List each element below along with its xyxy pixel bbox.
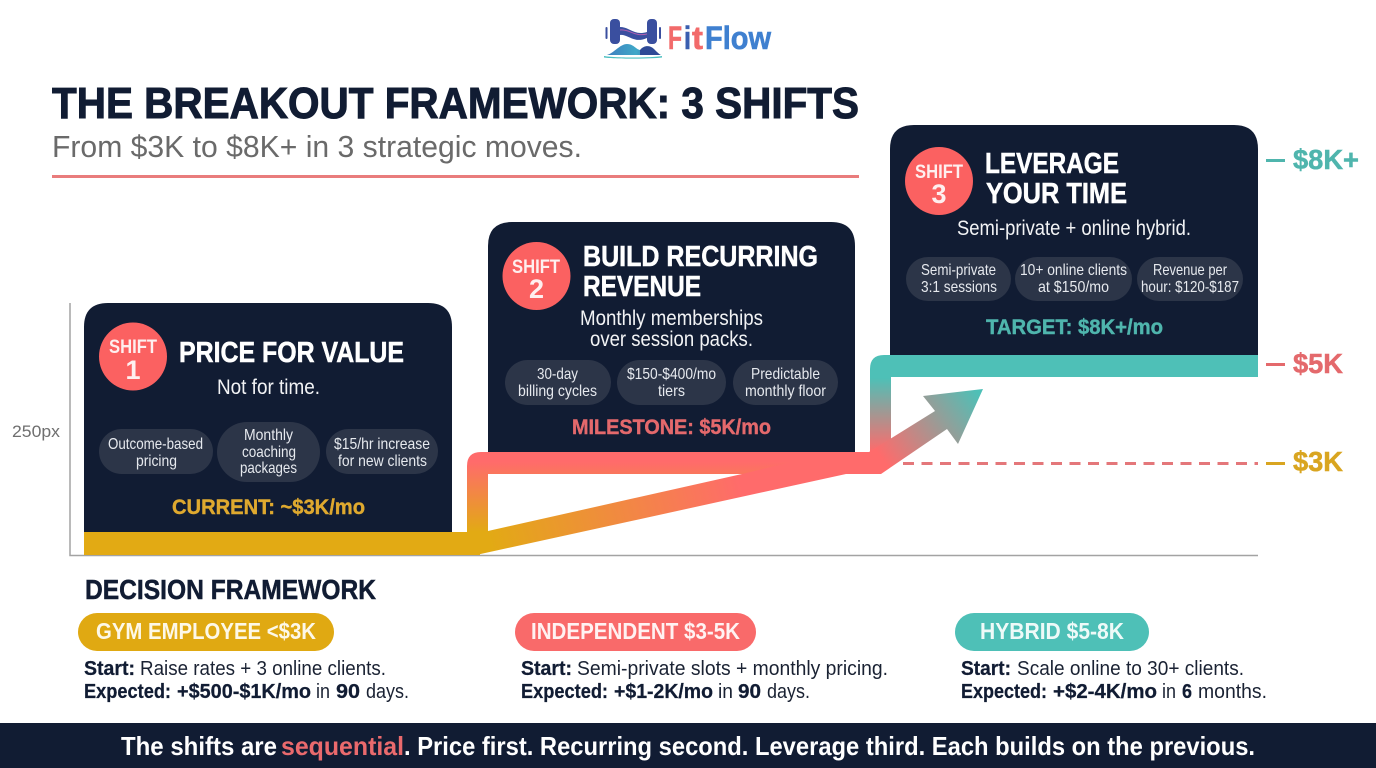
pill: tiers: $150-$400/mo bbox=[627, 366, 716, 383]
pill: tiers: tiers bbox=[658, 383, 685, 400]
gym employee expected line: Expected: bbox=[84, 681, 171, 703]
pill: revenue per hour: hour: $120-$187 bbox=[1141, 279, 1239, 296]
footer banner: . Price first. Recurring second. Leverage third. Each builds on the previous. bbox=[404, 731, 1255, 761]
shift 3 subheading: Semi-private + online hybrid. bbox=[957, 216, 1191, 240]
shift 2 subheading bbox=[580, 306, 763, 351]
logo wordmark: t bbox=[692, 20, 703, 56]
decision: hybrid bbox=[955, 613, 1267, 703]
icon: dumbbell with wave bbox=[604, 19, 662, 59]
shift 3 heading bbox=[985, 148, 1127, 210]
staircase growth path bbox=[84, 355, 1258, 555]
pill: monthly floor: Predictable bbox=[751, 366, 820, 383]
shift 3 badge bbox=[905, 147, 973, 215]
pill: outcome-based pricing: Outcome-based bbox=[108, 436, 203, 453]
logo wordmark: i bbox=[684, 20, 691, 56]
pill: billing cycles bbox=[505, 360, 611, 405]
independent expected line: in bbox=[718, 680, 733, 703]
logo wordmark bbox=[668, 20, 771, 56]
pill: tiers bbox=[617, 360, 726, 405]
hybrid expected line: 6 bbox=[1182, 681, 1192, 703]
shift 3 badge: 3 bbox=[931, 179, 947, 209]
footer banner bbox=[0, 723, 1376, 768]
gym employee start line: Raise rates + 3 online clients. bbox=[140, 657, 386, 680]
gym employee expected line: +$500-$1K/mo bbox=[177, 681, 311, 703]
panel: shift 2 bbox=[488, 222, 855, 452]
level label: $5K bbox=[1266, 348, 1343, 379]
decision: independent bbox=[515, 613, 888, 703]
logo wordmark: F bbox=[668, 20, 682, 56]
shift 1 badge: 1 bbox=[125, 355, 141, 385]
pill: rate increase bbox=[326, 429, 438, 474]
pill: semi-private sessions: 3:1 sessions bbox=[921, 279, 997, 296]
pill: online clients: at $150/mo bbox=[1038, 279, 1109, 296]
shift 2 subheading: over session packs. bbox=[590, 327, 753, 351]
decision: gym employee bbox=[78, 613, 409, 703]
pill: independent: INDEPENDENT $3-5K bbox=[531, 618, 740, 644]
shift 2 heading: BUILD RECURRING bbox=[583, 241, 818, 273]
current revenue: CURRENT: ~$3K/mo bbox=[172, 495, 365, 519]
level label: $8K+ bbox=[1266, 144, 1359, 175]
shift 1 subheading: Not for time. bbox=[217, 375, 320, 399]
shift 2 badge bbox=[502, 242, 570, 310]
pill: monthly floor: monthly floor bbox=[745, 383, 827, 400]
gym employee expected line: in bbox=[316, 680, 330, 703]
pill: hybrid: HYBRID $5-8K bbox=[980, 618, 1124, 644]
gym employee start line: Start: bbox=[84, 658, 135, 680]
pill: monthly coaching packages: coaching bbox=[242, 444, 296, 461]
shift 1 badge bbox=[99, 322, 167, 390]
footer banner: The shifts are bbox=[121, 731, 277, 761]
hybrid expected line: months. bbox=[1198, 680, 1267, 703]
pill: rate increase: for new clients bbox=[338, 453, 427, 470]
hybrid expected line: in bbox=[1162, 680, 1176, 703]
pill: rate increase: $15/hr increase bbox=[334, 436, 430, 453]
pill: hybrid bbox=[955, 613, 1149, 651]
title: THE BREAKOUT FRAMEWORK: 3 SHIFTS bbox=[52, 79, 859, 128]
pill: outcome-based pricing: pricing bbox=[136, 453, 177, 470]
independent expected line: Expected: bbox=[521, 681, 608, 703]
shift 1 heading: PRICE FOR VALUE bbox=[179, 337, 404, 369]
pill: monthly coaching packages: packages bbox=[240, 460, 297, 477]
pill: semi-private sessions bbox=[906, 257, 1011, 301]
pill: independent bbox=[515, 613, 756, 651]
shift 2 heading: REVENUE bbox=[583, 271, 701, 303]
shift 2 heading bbox=[583, 241, 818, 303]
level label: $5K: $5K bbox=[1293, 348, 1343, 379]
independent expected line bbox=[521, 680, 810, 703]
independent start line: Start: bbox=[521, 658, 572, 680]
hybrid start line: Scale online to 30+ clients. bbox=[1017, 657, 1244, 680]
shift 1 badge: SHIFT bbox=[109, 337, 157, 358]
gym employee expected line bbox=[84, 680, 409, 703]
pill: billing cycles: 30-day bbox=[537, 366, 578, 383]
subtitle: From $3K to $8K+ in 3 strategic moves. bbox=[52, 129, 582, 164]
pill: online clients: 10+ online clients bbox=[1020, 262, 1127, 279]
pill: gym employee: GYM EMPLOYEE <$3K bbox=[96, 618, 316, 644]
decision framework heading: DECISION FRAMEWORK bbox=[85, 574, 376, 605]
shift 2 subheading: Monthly memberships bbox=[580, 306, 763, 330]
hybrid start line: Start: bbox=[961, 658, 1011, 680]
gym employee expected line: 90 bbox=[336, 681, 360, 703]
logo: FitFlow bbox=[604, 19, 771, 59]
independent expected line: +$1-2K/mo bbox=[614, 681, 713, 703]
panel: shift 3 bbox=[890, 125, 1258, 355]
$3K dashed level line bbox=[903, 462, 1258, 465]
pill: monthly coaching packages: Monthly bbox=[244, 427, 293, 444]
independent start line: Semi-private slots + monthly pricing. bbox=[577, 657, 888, 680]
independent expected line: days. bbox=[767, 680, 810, 703]
hybrid expected line: Expected: bbox=[961, 681, 1047, 703]
shift 3 heading: LEVERAGE bbox=[985, 148, 1119, 180]
pill: revenue per hour bbox=[1137, 257, 1243, 301]
level label: $8K+: $8K+ bbox=[1293, 144, 1359, 175]
shift 2 badge: 2 bbox=[529, 274, 544, 304]
shift 3 heading: YOUR TIME bbox=[986, 178, 1127, 210]
milestone revenue: MILESTONE: $5K/mo bbox=[572, 415, 771, 439]
shift 3 badge: SHIFT bbox=[915, 162, 963, 183]
independent expected line: 90 bbox=[738, 681, 761, 703]
arrow: rising to target bbox=[846, 389, 983, 474]
pill: outcome-based pricing bbox=[99, 429, 213, 474]
hybrid expected line: +$2-4K/mo bbox=[1053, 681, 1157, 703]
panel: shift 1 bbox=[84, 303, 452, 532]
pill: online clients bbox=[1015, 257, 1132, 301]
pill: monthly coaching packages bbox=[217, 422, 320, 482]
target revenue: TARGET: $8K+/mo bbox=[986, 315, 1163, 339]
pill: monthly floor bbox=[733, 360, 838, 405]
chart axes bbox=[70, 303, 1258, 556]
shift 2 badge: SHIFT bbox=[512, 257, 560, 278]
footer banner: sequential bbox=[281, 731, 404, 761]
pill: revenue per hour: Revenue per bbox=[1153, 262, 1228, 279]
pill: billing cycles: billing cycles bbox=[518, 383, 597, 400]
pill: gym employee bbox=[78, 613, 334, 651]
y axis label: 250px bbox=[12, 422, 61, 441]
hybrid expected line bbox=[961, 680, 1267, 703]
pill: semi-private sessions: Semi-private bbox=[921, 262, 996, 279]
gym employee expected line: days. bbox=[366, 680, 409, 703]
level label: $3K bbox=[1266, 446, 1343, 477]
logo wordmark: Flow bbox=[705, 20, 771, 56]
level label: $3K: $3K bbox=[1293, 446, 1343, 477]
